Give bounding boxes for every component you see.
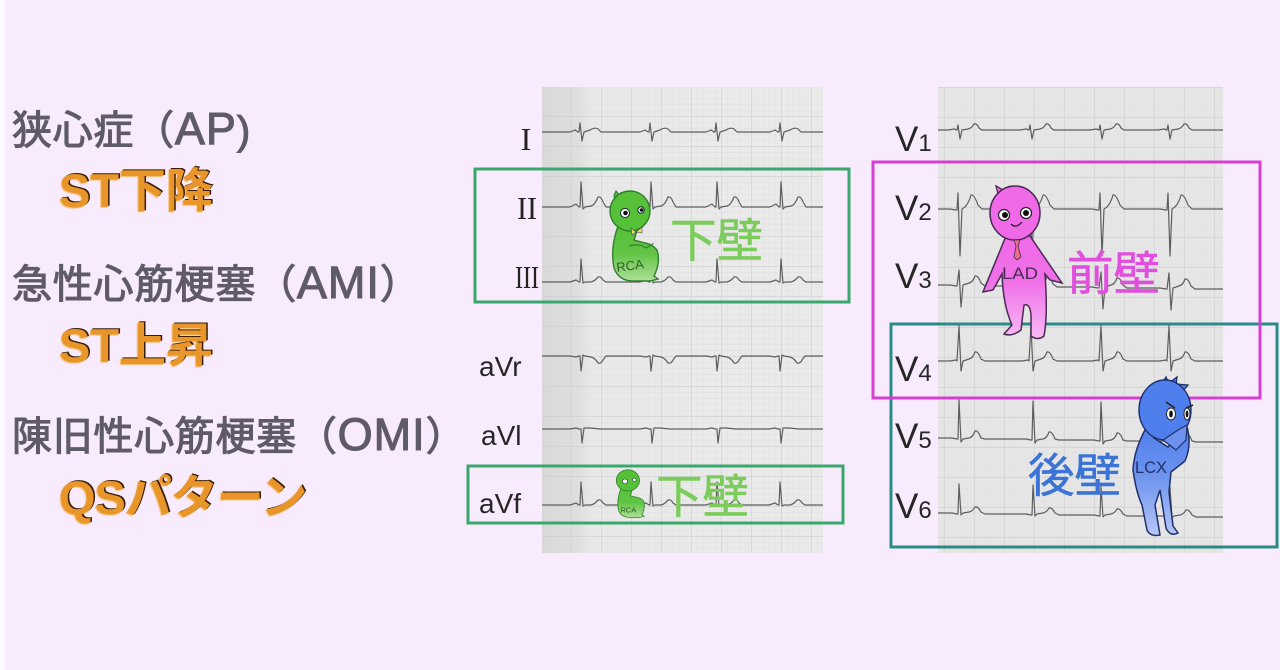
augmented lead labels: aVl (481, 420, 521, 451)
chest lead labels: V2 (895, 189, 932, 228)
augmented lead labels: aVr (479, 351, 522, 382)
icon: LCX character (1133, 377, 1193, 535)
augmented lead labels (479, 351, 522, 519)
chest lead labels: V4 (895, 350, 932, 389)
panel: limb lead ECG paper (542, 87, 823, 553)
chest lead labels: V6 (895, 487, 932, 526)
heading: old myocardial infarction: 陳旧性心筋梗塞（OMI） (12, 409, 466, 460)
chest lead labels: V1 (895, 120, 932, 159)
chest lead labels (895, 120, 932, 526)
chest lead traces (938, 124, 1223, 518)
chest lead labels: V3 (895, 257, 932, 296)
box: posterior wall leads (891, 324, 1277, 547)
finding: ST depression: ST下降 (59, 164, 213, 217)
limb lead labels: III (515, 259, 539, 295)
limb lead labels: II (517, 190, 537, 226)
box: lead aVf (468, 466, 843, 523)
label: posterior wall: 後壁 (1028, 450, 1121, 502)
limb lead traces (542, 123, 823, 506)
panel: chest lead ECG paper (938, 87, 1223, 553)
icon: LAD character (983, 186, 1062, 338)
box: leads II and III (475, 169, 849, 302)
icon: RCA character (610, 191, 658, 281)
heading: angina: 狭心症（AP) (12, 103, 251, 154)
augmented lead labels: aVf (479, 488, 521, 519)
limb lead labels (515, 121, 539, 295)
icon: RCA character: RCA (615, 256, 645, 275)
heading: acute myocardial infarction: 急性心筋梗塞（AMI） (12, 257, 421, 308)
box: anterior wall leads (873, 162, 1260, 398)
finding: QS pattern: QSパターン (59, 471, 307, 524)
chest lead labels: V5 (895, 417, 932, 456)
icon: small RCA character (616, 470, 644, 517)
label: inferior wall (aVf): 下壁 (656, 471, 749, 523)
label: inferior wall: 下壁 (670, 215, 763, 267)
limb lead labels: I (521, 121, 531, 157)
finding: ST elevation: ST上昇 (59, 319, 213, 372)
icon: LCX character: LCX (1135, 458, 1167, 477)
icon: small RCA character: RCA (620, 506, 636, 515)
label: anterior wall: 前壁 (1067, 248, 1160, 300)
icon: LAD character: LAD (1002, 264, 1038, 283)
